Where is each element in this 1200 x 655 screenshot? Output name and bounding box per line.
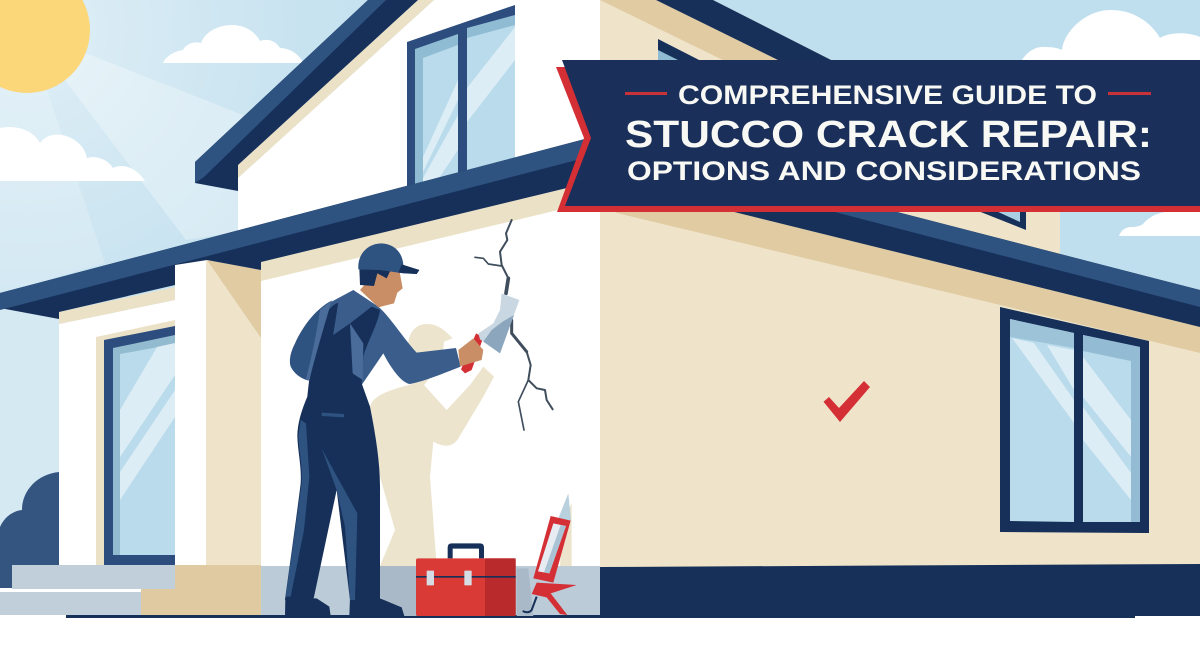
- trowel blade: [478, 293, 519, 353]
- ground line: [66, 615, 606, 618]
- beige band under main roof: [261, 180, 600, 281]
- title line 3: OPTIONS AND CONSIDERATIONS: [627, 156, 1141, 186]
- toolbox: [416, 543, 516, 616]
- main roof: [0, 135, 600, 319]
- cloud: left: [0, 127, 145, 181]
- banner red edge: [556, 67, 1200, 212]
- title line 1: COMPREHENSIVE GUIDE TO: [678, 80, 1097, 110]
- cloud: lower right: [1119, 212, 1200, 236]
- shirt and front arm: [328, 290, 461, 385]
- rule right: [1108, 92, 1151, 95]
- worker scene: [285, 220, 577, 616]
- porch column: [175, 260, 261, 566]
- upper right small window: [658, 39, 703, 62]
- right upper wall, beige: [600, 0, 1060, 260]
- check mark: [824, 381, 870, 422]
- gable beige fascia: [238, 0, 434, 178]
- right roof: [706, 205, 1200, 327]
- title banner: [556, 60, 1200, 212]
- right window: [1000, 307, 1149, 533]
- lower left window: [96, 320, 175, 566]
- sun: [0, 0, 90, 93]
- lower white wall: [261, 200, 600, 566]
- upper right navy roof: [656, 0, 835, 62]
- ground strip: [261, 566, 600, 616]
- rule left: [625, 92, 667, 95]
- upper wall, white: [238, 0, 600, 240]
- gable roof: [195, 0, 418, 191]
- rear small window: [963, 205, 1026, 230]
- cloud: top right: [1021, 10, 1200, 62]
- beige main wall: [600, 205, 1200, 570]
- back sleeve highlight: [306, 301, 332, 381]
- hand: [458, 338, 483, 367]
- caulk gun shadow: [517, 568, 533, 616]
- upper right tan strip: [600, 0, 782, 62]
- bush: [0, 472, 59, 588]
- worker: [285, 243, 519, 616]
- porch steps: [0, 565, 261, 615]
- title line 2: STUCCO CRACK REPAIR:: [625, 114, 1152, 156]
- wall crack: [475, 220, 553, 430]
- left white block: [59, 300, 175, 566]
- trowel handle: [461, 333, 483, 373]
- trouser highlights: [286, 413, 357, 600]
- caulk gun: [523, 493, 577, 615]
- hair: [359, 268, 391, 286]
- cap visor: [398, 264, 419, 274]
- cap: [358, 243, 419, 274]
- cloud: top centre: [163, 25, 303, 63]
- worker shadow on wall: [370, 324, 494, 566]
- ground shadow: [380, 566, 417, 616]
- overalls and legs: [285, 303, 380, 600]
- collar patch: [333, 290, 372, 335]
- chest highlight: [350, 323, 363, 380]
- boots: [285, 598, 404, 616]
- banner navy ribbon: [562, 60, 1200, 206]
- neck and face: [360, 270, 403, 307]
- back arm sleeve: [290, 301, 332, 381]
- right roof tan soffit: [600, 205, 1200, 353]
- left beige band: [59, 287, 175, 324]
- navy base band: [600, 564, 1200, 618]
- upper window: [407, 5, 515, 195]
